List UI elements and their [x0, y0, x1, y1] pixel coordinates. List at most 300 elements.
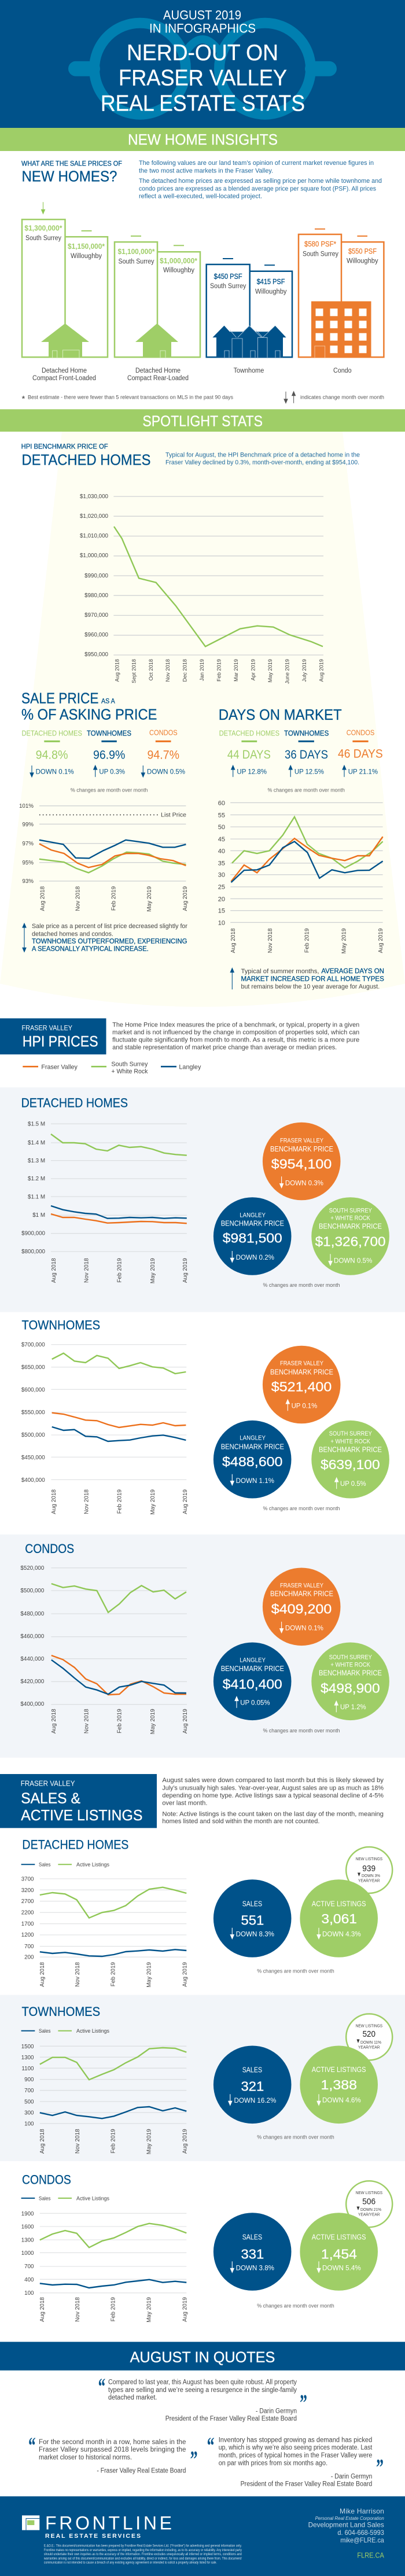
line chart: condo sales and listings: 700 [24, 2264, 34, 2270]
circle: Langley benchmark: LANGLEY [240, 1435, 266, 1442]
logo rings background [76, 23, 329, 115]
line chart: detached benchmark price: Sept 2018 [131, 659, 137, 683]
line chart: sale price percent: 101% [19, 803, 34, 809]
line chart: sale price percent [19, 803, 189, 912]
line chart: sale price percent: 93% [22, 878, 34, 885]
circle: active listings: 1,454 [321, 2246, 357, 2261]
quote: Darin Germyn inventory: on par with prices from six months ago. [219, 2460, 327, 2467]
line chart: condo sales and listings: Aug 2018 [39, 2297, 46, 2322]
contact details: Development Land Sales [308, 2520, 384, 2529]
title: AUGUST 2019 [163, 8, 241, 22]
quote: Darin Germyn inventory: “ [207, 2432, 214, 2458]
line chart: detached sales and listings: 1200 [21, 1932, 34, 1938]
quote: Fraser Valley Real Estate Board: ” [190, 2446, 198, 2472]
panel: sales condos [21, 2173, 392, 2323]
icon: Frontline logo mark [22, 2515, 39, 2530]
text: HPI explanation: and stable representation of market price change than average or median prices. [112, 1044, 337, 1051]
quote: Fraser Valley Real Estate Board: For the second month in a row, home sales in the [39, 2439, 186, 2446]
circle: new listings: NEW LISTINGS [356, 2023, 382, 2028]
legend [21, 2195, 109, 2202]
line chart: townhome sales and listings: Aug 2018 [39, 2129, 46, 2154]
line chart: days on market: 25 [218, 884, 225, 891]
text: HPI explanation [112, 1021, 359, 1051]
section box: sales and active listings: SALES & [21, 1790, 80, 1806]
legend [21, 2028, 109, 2034]
contact details [308, 2507, 384, 2560]
circle: new listings [346, 2181, 392, 2227]
text: sales explanation [162, 1777, 384, 1825]
callout: days on market note: Typical of summer months, [241, 968, 319, 975]
quote: Darin Germyn robust: detached market. [108, 2394, 157, 2401]
line chart: condo sales and listings: 1000 [21, 2250, 34, 2257]
text: HPI explanation: fluctuate quite significantly from month to month. As a result, this metric is a more pure [112, 1037, 359, 1044]
text: sales explanation: August sales were down compared to last month but this is likely skewed by [162, 1777, 384, 1784]
line chart: detached benchmark price: Feb 2019 [216, 659, 222, 682]
circle: sales: 551 [241, 1913, 264, 1928]
line chart: detached benchmark price: Aug 2018 [114, 659, 120, 682]
line chart: detached benchmark price: Mar 2019 [233, 659, 239, 682]
circle: sales: SALES [242, 2066, 262, 2074]
line chart: townhome sales and listings: 1100 [21, 2066, 34, 2072]
line chart: condo HPI [20, 1565, 189, 1734]
line chart: sale price percent: May 2019 [146, 886, 153, 912]
quote: Darin Germyn robust: ” [300, 2390, 307, 2416]
line chart: townhome sales and listings: 1300 [21, 2055, 34, 2061]
text: sales explanation: Note: Active listings is the count taken on the last day of the month, meaning [162, 1810, 384, 1817]
circle: new listings: NEW LISTINGS [356, 2190, 382, 2195]
stats: sale price by home type: UP 0.3% [99, 767, 125, 775]
line chart: detached HPI: Nov 2018 [83, 1258, 90, 1283]
contact details: mike@FLRE.ca [340, 2536, 384, 2544]
circle: Fraser Valley benchmark: $521,400 [271, 1379, 332, 1394]
line chart: sale price percent: 99% [22, 822, 34, 828]
line chart: condo HPI: $480,000 [20, 1611, 45, 1617]
callout: sale price note: Sale price as a percent of list price decreased slightly for [32, 923, 187, 930]
intro text: The following values are our land team’s opinion of current market revenue figures in [139, 160, 374, 167]
legend: Active Listings [76, 2028, 109, 2034]
line chart: detached benchmark price: June 2019 [285, 659, 290, 684]
circle: sales: 331 [241, 2246, 264, 2261]
heading: sale price as percent of asking [21, 691, 157, 723]
title [101, 8, 305, 116]
line chart: townhome HPI: $500,000 [21, 1432, 45, 1438]
intro text [139, 160, 382, 200]
heading: CONDOS [25, 1541, 74, 1556]
stats: sale price by home type: DOWN 0.5% [147, 767, 185, 775]
panel: HPI condos [0, 1534, 405, 1758]
title: NERD-OUT ON [127, 41, 278, 65]
circle: South Surrey benchmark: SOUTH SURREY [329, 1430, 372, 1437]
section box: HPI prices [0, 1018, 106, 1054]
disclaimer: Frontline makes no representations or warranties, express or implied, regarding the information including, as to its accuracy or reliability. Any interested party [44, 2549, 242, 2552]
legend [21, 1862, 109, 1868]
circle: South Surrey benchmark: $639,100 [321, 1457, 380, 1472]
building chart: detached front-loaded: Willoughby [71, 253, 102, 260]
line chart: detached benchmark price: $1,030,000 [80, 494, 109, 500]
line chart: townhome HPI: Feb 2019 [116, 1489, 123, 1514]
circle: sales [213, 2213, 292, 2291]
building chart: detached rear-loaded: Willoughby [163, 267, 194, 274]
line chart: detached sales and listings: 3700 [21, 1876, 34, 1883]
circle: Fraser Valley benchmark: UP 0.1% [292, 1401, 318, 1410]
stats: sale price by home type: CONDOS [149, 729, 178, 737]
circle: active listings: DOWN 4.3% [322, 1930, 361, 1938]
line chart: condo sales and listings: 1300 [21, 2237, 34, 2244]
line chart: days on market: 40 [218, 848, 225, 855]
legend: Sales [39, 1862, 51, 1868]
line chart: condo sales and listings: 1600 [21, 2224, 34, 2230]
circle: South Surrey benchmark: + WHITE ROCK [330, 1438, 371, 1445]
legend: arrows indicate change [284, 392, 384, 403]
contact details: FLRE.CA [357, 2551, 384, 2560]
building chart: detached rear-loaded [115, 236, 200, 382]
building chart: detached front-loaded [22, 219, 108, 382]
line chart: detached HPI: Feb 2019 [116, 1258, 123, 1283]
line chart: detached HPI: $900,000 [21, 1230, 46, 1237]
quote: Darin Germyn inventory: - Darin Germyn [331, 2473, 372, 2480]
heading: sale price as percent of asking: AS A [101, 697, 115, 705]
line chart: townhome sales and listings: 900 [24, 2077, 34, 2083]
line chart: condo sales and listings [21, 2211, 188, 2323]
circle: South Surrey benchmark: $1,326,700 [315, 1234, 386, 1249]
building chart: detached rear-loaded: Compact Rear-Loaded [127, 375, 189, 382]
circle: new listings: NEW LISTINGS [356, 1856, 382, 1861]
line chart: detached HPI: Aug 2018 [51, 1258, 57, 1283]
circle: sales: 321 [241, 2078, 264, 2093]
building chart: condo: $580 PSF* [304, 240, 336, 248]
circle: Fraser Valley benchmark: FRASER VALLEY [280, 1137, 324, 1144]
quote: Darin Germyn robust: President of the Fraser Valley Real Estate Board [165, 2416, 297, 2423]
circle: South Surrey benchmark: UP 1.2% [340, 1703, 366, 1711]
line chart: detached sales and listings: 2200 [21, 1909, 34, 1916]
circle: Langley benchmark: BENCHMARK PRICE [221, 1664, 284, 1673]
line chart: condo sales and listings: May 2019 [146, 2297, 153, 2323]
line chart: condo HPI: May 2019 [150, 1709, 156, 1734]
line chart: townhome HPI: $650,000 [21, 1364, 45, 1371]
legend: Active Listings [76, 1862, 109, 1868]
contact details: d. 604-668-5993 [337, 2529, 384, 2537]
line chart: days on market: Aug 2019 [378, 928, 384, 953]
line chart: sale price percent: Aug 2019 [182, 886, 189, 911]
icon: house front-loaded [41, 323, 89, 358]
line chart: townhome HPI: $450,000 [21, 1455, 45, 1461]
line chart: detached benchmark price: July 2019 [301, 659, 307, 682]
circle: South Surrey benchmark: BENCHMARK PRICE [319, 1445, 382, 1454]
line chart: sale price percent: 97% [22, 841, 34, 847]
circle: South Surrey benchmark [311, 1642, 389, 1720]
line chart: days on market: Feb 2019 [304, 928, 310, 953]
circle: South Surrey benchmark: + WHITE ROCK [330, 1662, 371, 1669]
line chart: sale price percent: Aug 2018 [39, 886, 46, 911]
line chart: detached sales and listings: 1700 [21, 1921, 34, 1927]
line chart: detached benchmark price: Nov 2018 [165, 659, 171, 682]
header banner [0, 0, 405, 128]
line chart: sale price percent: 95% [22, 860, 34, 866]
circle: Langley benchmark: LANGLEY [240, 1657, 266, 1664]
circle: new listings: 520 [363, 2029, 375, 2039]
circle: Fraser Valley benchmark: BENCHMARK PRICE [270, 1589, 333, 1598]
line chart: days on market: 20 [218, 896, 225, 903]
section band: new home insights [0, 128, 405, 151]
circle: new listings: DOWN 3% [362, 1874, 380, 1878]
building chart: condo: $550 PSF [348, 247, 377, 255]
line chart: townhome sales and listings: May 2019 [146, 2129, 153, 2154]
circle: Fraser Valley benchmark: $409,200 [271, 1601, 332, 1616]
line chart: days on market [218, 800, 384, 954]
heading: DETACHED HOMES [21, 1095, 128, 1110]
line chart: detached sales and listings: 200 [24, 1955, 34, 1960]
note: % changes are month over month [257, 2135, 334, 2141]
note: % changes are month over month [263, 1282, 340, 1289]
line chart: detached sales and listings: 2700 [21, 1898, 34, 1905]
stats: days on market by home type: DETACHED HOMES [219, 729, 279, 737]
section box: sales and active listings: FRASER VALLEY [21, 1779, 75, 1788]
footnote: Best estimate - there were fewer than 5 relevant transactions on MLS in the past 90 days [28, 394, 233, 400]
heading: TOWNHOMES [22, 2004, 100, 2019]
line chart: detached HPI: May 2019 [150, 1258, 156, 1283]
circle: new listings: 939 [362, 1864, 375, 1874]
stats: days on market by home type: 44 DAYS [227, 748, 271, 761]
circle: Langley benchmark: LANGLEY [240, 1212, 266, 1219]
line chart: townhome sales and listings [21, 2044, 188, 2154]
callout: days on market note: AVERAGE DAYS ON [321, 968, 384, 975]
callout: sale price note: detached homes and condos. [32, 930, 113, 937]
callout: sale price note: TOWNHOMES OUTPERFORMED, EXPERIENCING [32, 939, 187, 945]
quote: Darin Germyn inventory: President of the Fraser Valley Real Estate Board [241, 2481, 372, 2487]
stats: days on market by home type: % changes are month over month [267, 787, 345, 793]
text: detached summary: Fraser Valley declined by 0.3%, month-over-month, ending at $954,100. [165, 459, 359, 466]
section band: August in quotes [0, 2342, 405, 2371]
text: sales explanation: over last month. [162, 1799, 207, 1806]
circle: active listings [300, 2213, 378, 2291]
circle: South Surrey benchmark: DOWN 0.5% [334, 1256, 373, 1264]
heading: DETACHED HOMES [22, 1838, 128, 1852]
circle: South Surrey benchmark [311, 1197, 389, 1275]
circle: Fraser Valley benchmark: $954,100 [271, 1156, 332, 1171]
line chart: detached sales and listings [21, 1876, 188, 1988]
legend: HPI regions: Fraser Valley [41, 1064, 78, 1071]
line chart: days on market: 10 [218, 919, 225, 926]
section band: August in quotes: AUGUST IN QUOTES [130, 2350, 275, 2366]
line chart: townhome HPI: $600,000 [21, 1387, 45, 1393]
quote: Darin Germyn robust [98, 2373, 307, 2423]
building chart: detached front-loaded: $1,150,000* [68, 242, 105, 251]
circle: active listings: ACTIVE LISTINGS [312, 2233, 366, 2242]
building chart: townhome: Willoughby [255, 288, 287, 295]
legend: Active Listings [76, 2195, 109, 2202]
circle: new listings: DOWN 21% [360, 2208, 381, 2212]
note: % changes are month over month [257, 1968, 334, 1974]
quote: Darin Germyn inventory: month, prices of typical homes in the Fraser Valley were [219, 2452, 372, 2459]
circle: active listings: DOWN 5.4% [322, 2264, 361, 2272]
line chart: days on market: Aug 2018 [230, 928, 237, 953]
quote: Darin Germyn robust: “ [98, 2373, 105, 2400]
line chart: detached benchmark price: $950,000 [84, 652, 109, 658]
quote: Fraser Valley Real Estate Board: - Fraser Valley Real Estate Board [97, 2467, 186, 2474]
line chart: condo HPI: Aug 2018 [51, 1709, 57, 1734]
stats: days on market by home type: 46 DAYS [338, 747, 383, 760]
line chart: detached HPI: Aug 2019 [182, 1258, 189, 1283]
circle: Langley benchmark: DOWN 1.1% [236, 1477, 274, 1485]
line chart: condo HPI: $520,000 [20, 1565, 45, 1572]
line chart: days on market: 15 [218, 908, 225, 915]
building chart: detached rear-loaded: South Surrey [118, 259, 154, 266]
line chart: detached sales and listings: Feb 2019 [110, 1962, 117, 1986]
line chart: condo HPI: Aug 2019 [182, 1709, 189, 1734]
heading: new homes [21, 160, 122, 185]
building chart: detached front-loaded: Compact Front-Loaded [32, 375, 96, 382]
line chart: days on market: 55 [218, 812, 225, 819]
section band: spotlight stats [0, 409, 405, 432]
panel: sales detached [21, 1838, 392, 1988]
contact details: Mike Harrison [340, 2507, 384, 2515]
heading: detached homes benchmark: HPI BENCHMARK PRICE OF [21, 443, 108, 451]
line chart: detached benchmark price: Aug 2019 [318, 659, 324, 682]
line chart: detached sales and listings: May 2019 [146, 1962, 153, 1988]
stats: sale price by home type: DETACHED HOMES [22, 729, 82, 737]
arrow: green down [42, 202, 45, 214]
line chart: detached benchmark price [80, 494, 324, 684]
text: sales explanation: homes listed and sold within the month are not counted. [162, 1818, 319, 1825]
stats: days on market by home type: TOWNHOMES [284, 729, 329, 737]
disclaimer [43, 2545, 242, 2564]
line chart: sale price percent: Feb 2019 [111, 886, 117, 911]
quote: Fraser Valley Real Estate Board [28, 2432, 198, 2474]
line chart: detached benchmark price: $1,000,000 [80, 553, 109, 559]
circle: sales: DOWN 3.8% [236, 2264, 274, 2272]
line chart: condo sales and listings: 1900 [21, 2211, 34, 2217]
building chart: detached front-loaded: South Surrey [25, 235, 61, 242]
icon: townhouses [212, 326, 286, 358]
stats: sale price by home type: % changes are month over month [71, 787, 148, 793]
circle: sales [213, 2046, 292, 2124]
heading: days on market: DAYS ON MARKET [219, 707, 342, 723]
circle: active listings: 1,388 [321, 2077, 357, 2092]
contact details: Personal Real Estate Corporation [315, 2515, 384, 2521]
section box: sales and active listings [0, 1774, 157, 1828]
line chart: detached HPI: $1.5 M [28, 1121, 45, 1127]
line chart: days on market: May 2019 [341, 928, 347, 954]
circle: new listings [346, 2014, 392, 2060]
circle: active listings: DOWN 4.6% [322, 2096, 361, 2104]
circle: South Surrey benchmark: BENCHMARK PRICE [319, 1222, 382, 1231]
circle: Langley benchmark: UP 0.05% [240, 1699, 270, 1707]
circle: Langley benchmark: $410,400 [223, 1676, 282, 1691]
icon: condo tower [311, 301, 371, 358]
line chart: detached sales and listings: Aug 2019 [182, 1962, 188, 1987]
circle: Langley benchmark: $488,600 [222, 1454, 282, 1469]
building chart: detached rear-loaded: $1,100,000* [118, 248, 155, 256]
circle: South Surrey benchmark: SOUTH SURREY [329, 1654, 372, 1661]
line chart: sale price percent: Nov 2018 [75, 886, 81, 911]
line chart: detached HPI [21, 1121, 189, 1283]
panel: HPI detached homes [0, 1087, 405, 1312]
quote: Darin Germyn inventory: up, which is why we’re also seeing prices moderate. Last [219, 2445, 373, 2452]
line chart: townhome HPI: $550,000 [21, 1410, 45, 1416]
building chart: townhome: South Surrey [210, 283, 246, 290]
stats: sale price by home type: TOWNHOMES [87, 729, 131, 737]
panel: HPI townhomes [21, 1318, 389, 1515]
logo wordmark: REAL ESTATE SERVICES [45, 2533, 141, 2540]
text: sales explanation: depending on home type. Active listings saw a typical seasonal decline of 4-5% [162, 1793, 384, 1799]
circle: Langley benchmark [213, 1421, 292, 1499]
circle: active listings [300, 1879, 378, 1957]
line chart: condo sales and listings: Feb 2019 [110, 2297, 117, 2321]
line chart: detached benchmark price: Dec 2018 [182, 659, 188, 682]
building chart: townhome: $450 PSF [214, 273, 242, 281]
line chart: condo HPI: $440,000 [20, 1656, 45, 1662]
line chart: condo sales and listings: Aug 2019 [182, 2297, 188, 2322]
line chart: detached benchmark price: $980,000 [84, 593, 109, 599]
legend: HPI regions: Langley [179, 1064, 201, 1071]
line chart: condo HPI: Feb 2019 [116, 1709, 123, 1734]
line chart: detached sales and listings: Nov 2018 [75, 1962, 81, 1987]
circle: South Surrey benchmark: + WHITE ROCK [330, 1215, 371, 1222]
stats: days on market by home type: UP 21.1% [348, 767, 378, 775]
line chart: days on market: 30 [218, 872, 225, 879]
stats: days on market by home type: 36 DAYS [285, 748, 328, 761]
circle: Fraser Valley benchmark: BENCHMARK PRICE [270, 1367, 333, 1376]
quote: Fraser Valley Real Estate Board: Fraser Valley surpassed 2018 levels bringing the [39, 2446, 186, 2453]
stats: days on market by home type [219, 729, 383, 793]
circle: new listings [346, 1847, 392, 1893]
line chart: condo sales and listings: Nov 2018 [75, 2297, 81, 2322]
disclaimer: E.&O.E.: This document/communication has been prepared by Frontline Real Estate Services Ltd. (“Frontline”) for advertising and general information only. [44, 2545, 242, 2548]
legend: Sales [39, 2028, 51, 2034]
line chart: detached sales and listings: Aug 2018 [39, 1962, 46, 1987]
stats: days on market by home type: CONDOS [347, 729, 374, 737]
circle: Fraser Valley benchmark [263, 1568, 340, 1646]
quote: Darin Germyn robust: Compared to last year, this August has been quite robust. All property [108, 2379, 297, 2386]
intro text: reflect a well-executed, well-located project. [139, 193, 262, 200]
disclaimer: communication is not intended to cause a breach of any existing agency agreement or intended to solicit a property already listed for sale. [44, 2561, 217, 2564]
circle: South Surrey benchmark: BENCHMARK PRICE [319, 1669, 382, 1677]
circle: active listings: 3,061 [321, 1911, 357, 1926]
building chart: townhome: $415 PSF [257, 278, 285, 286]
circle: South Surrey benchmark [311, 1421, 389, 1499]
line chart: condo sales and listings: 100 [24, 2290, 34, 2297]
line chart: detached benchmark price: $1,010,000 [80, 533, 109, 539]
building chart: condo: South Surrey [303, 251, 338, 258]
heading: new homes: NEW HOMES? [22, 168, 117, 185]
line chart: townhome HPI: Nov 2018 [83, 1489, 90, 1514]
line chart: detached HPI: $1.4 M [28, 1140, 45, 1146]
circle: Langley benchmark: DOWN 0.2% [236, 1253, 274, 1261]
circle: sales: SALES [242, 2233, 262, 2242]
stats: days on market by home type: UP 12.5% [294, 767, 324, 775]
title: REAL ESTATE STATS [101, 91, 305, 116]
callout: sale price note [23, 923, 187, 952]
circle: new listings: YEAR/YEAR [358, 1879, 380, 1883]
section box: sales and active listings: ACTIVE LISTINGS [21, 1808, 143, 1824]
callout: days on market note: but remains below the 10 year average for August. [241, 984, 380, 991]
heading: sale price as percent of asking: SALE PRICE [21, 691, 98, 707]
section box: HPI prices: HPI PRICES [23, 1033, 98, 1050]
line chart: townhome HPI: Aug 2019 [182, 1489, 189, 1514]
line chart: detached benchmark price: $970,000 [84, 612, 109, 619]
line chart: detached HPI: $1.3 M [28, 1158, 45, 1164]
line chart: detached HPI: $1.2 M [28, 1176, 45, 1182]
line chart: townhome sales and listings: 300 [24, 2110, 34, 2117]
line chart: townhome HPI: $400,000 [21, 1477, 45, 1484]
quote: Darin Germyn inventory: Inventory has stopped growing as demand has picked [219, 2437, 372, 2444]
stats: sale price by home type [22, 729, 185, 793]
line chart: townhome HPI: Aug 2018 [51, 1489, 57, 1514]
stats: sale price by home type: 96.9% [93, 749, 125, 762]
line chart: days on market: 45 [218, 836, 225, 843]
quote: Darin Germyn robust: - Darin Germyn [256, 2408, 297, 2415]
text: HPI explanation: market and is not influenced by the change in composition of properties sold, which can [112, 1029, 359, 1036]
